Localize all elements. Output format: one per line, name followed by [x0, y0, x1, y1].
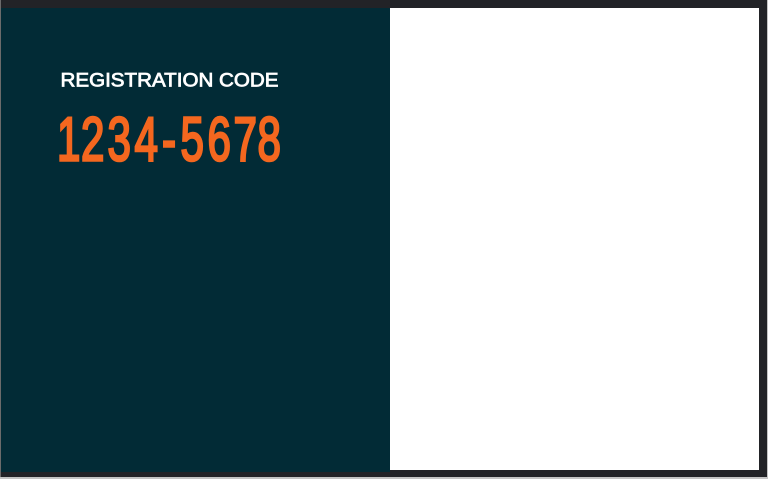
code number: 1234-5678	[57, 106, 281, 175]
panel: blank white area	[390, 8, 759, 470]
panel: registration code	[1, 8, 390, 472]
heading: registration code: REGISTRATION CODE	[60, 70, 278, 92]
